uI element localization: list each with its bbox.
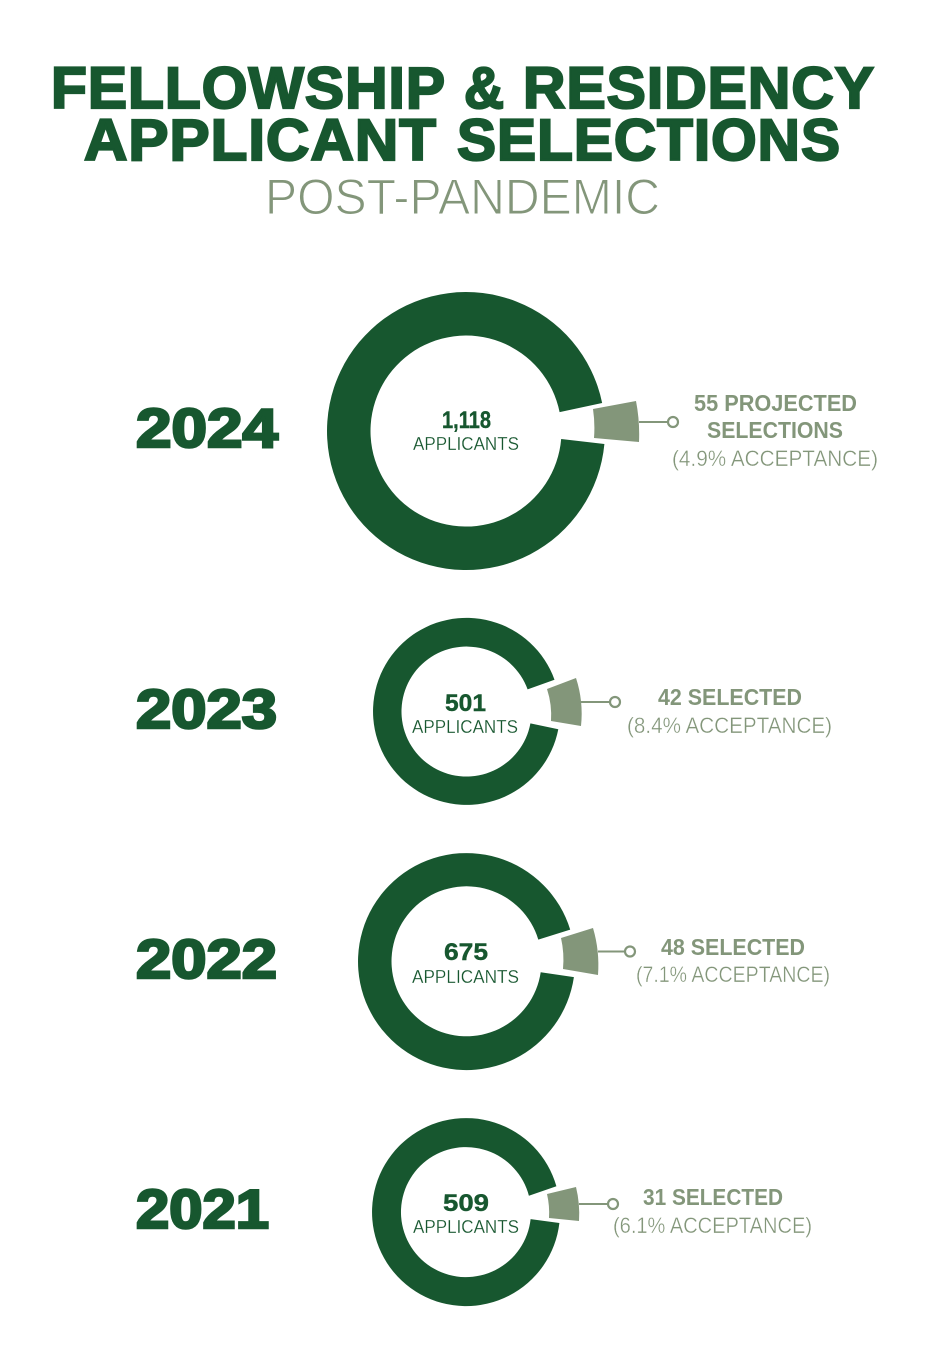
donut ring 2022 (358, 853, 574, 1070)
panel: 2022 (136, 853, 830, 1070)
center label 2022: 675 (444, 939, 488, 966)
selection text 2021: 31 SELECTED (643, 1184, 783, 1210)
year label 2023: 2023 (136, 678, 277, 740)
year label 2021: 2021 (136, 1178, 269, 1240)
selection text 2024: SELECTIONS (707, 417, 843, 443)
leader line 2023 (581, 697, 620, 707)
subtitle: POST-PANDEMIC (265, 169, 660, 225)
leader line 2022 (598, 946, 635, 956)
donut ring 2021 (372, 1118, 559, 1306)
panel: 2024 (136, 292, 878, 570)
title: SELECTIONS (457, 108, 841, 173)
wedge 2024 (593, 401, 639, 442)
year label 2022: 2022 (136, 928, 277, 990)
center label 2024: APPLICANTS (413, 434, 519, 454)
selection text 2023: 42 SELECTED (658, 684, 802, 710)
wedge 2023 (547, 678, 582, 726)
selection text 2021: (6.1% ACCEPTANCE) (613, 1213, 812, 1238)
center label 2024: 1,118 (442, 407, 491, 434)
donut ring 2023 (373, 618, 558, 805)
selection text 2022: 48 SELECTED (661, 934, 805, 960)
title: RESIDENCY (523, 56, 875, 121)
panel: 2021 (136, 1118, 812, 1306)
selection text 2022: (7.1% ACCEPTANCE) (636, 962, 830, 987)
wedge 2021 (547, 1187, 579, 1221)
center label 2021: 509 (443, 1190, 489, 1217)
wedge 2022 (561, 928, 598, 975)
selection text 2023: (8.4% ACCEPTANCE) (627, 713, 832, 738)
selection text 2024: 55 PROJECTED (694, 390, 857, 416)
selection text 2024: (4.9% ACCEPTANCE) (672, 446, 878, 471)
title: & (464, 56, 505, 121)
title (51, 56, 875, 173)
leader line 2021 (579, 1199, 618, 1209)
donut ring 2024 (327, 292, 604, 570)
center label 2023 (412, 690, 518, 737)
center label 2022: APPLICANTS (412, 967, 519, 987)
center label 2023: 501 (445, 690, 486, 717)
selection text 2021 (613, 1184, 812, 1238)
title: APPLICANT (84, 108, 437, 173)
selection text 2022 (636, 934, 830, 987)
center label 2024 (413, 407, 519, 454)
panel: 2023 (136, 618, 832, 805)
center label 2023: APPLICANTS (412, 717, 518, 737)
center label 2021: APPLICANTS (413, 1217, 519, 1237)
center label 2021 (413, 1190, 519, 1237)
selection text 2024 (672, 390, 878, 471)
selection text 2023 (627, 684, 832, 738)
title: FELLOWSHIP (51, 56, 446, 121)
center label 2022 (412, 939, 519, 987)
leader line 2024 (639, 417, 678, 427)
year label 2024: 2024 (136, 397, 278, 459)
